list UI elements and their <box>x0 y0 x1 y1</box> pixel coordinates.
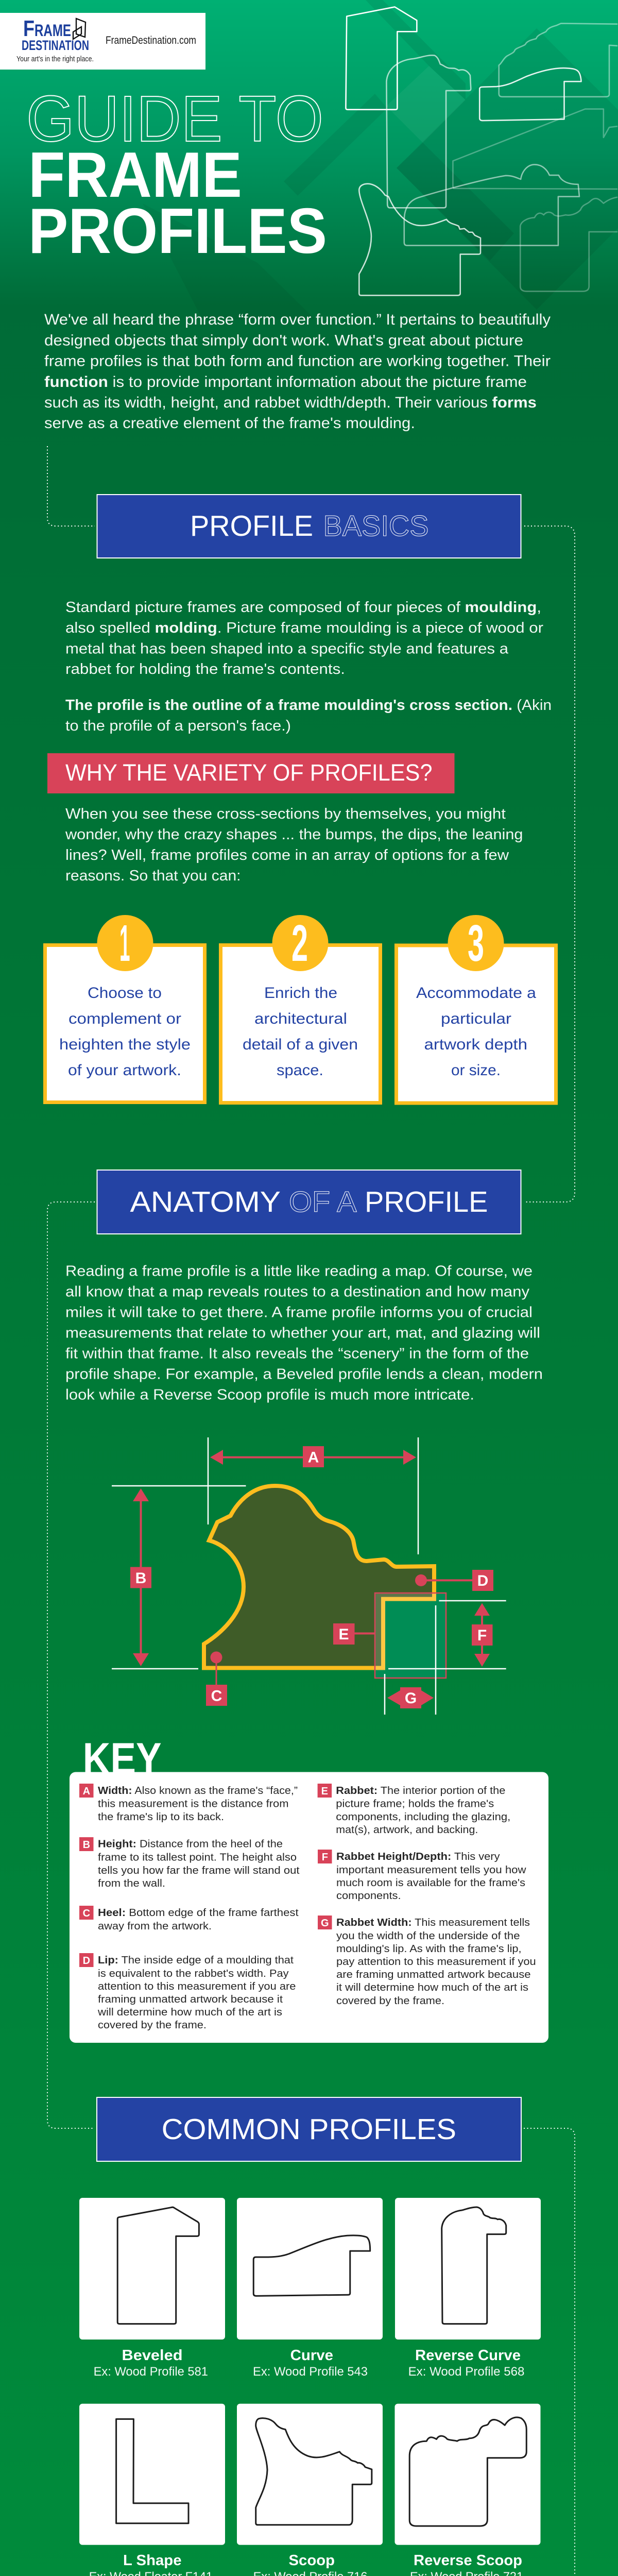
guide lines <box>112 1437 506 1715</box>
key F rabbet height: important measurement tells you how <box>336 1865 526 1876</box>
logo box: Your art's in the right place. <box>16 55 94 63</box>
text: anatomy intro: measurements that relate to whether your art, mat, and glazing will <box>65 1325 540 1342</box>
heading: anatomy of a profile: OF A <box>289 1185 357 1218</box>
key A width: the frame's lip to its back. <box>98 1811 224 1823</box>
key G rabbet width: pay attention to this measurement if you <box>336 1956 536 1968</box>
panel: scoop: Scoop <box>288 2552 335 2569</box>
card 3: artwork depth <box>424 1036 527 1053</box>
key E rabbet: mat(s), artwork, and backing. <box>336 1824 478 1836</box>
key F rabbet height: much room is available for the frame's <box>336 1877 525 1889</box>
key C heel: Heel: Bottom edge of the frame farthest <box>98 1907 299 1919</box>
heading: profile basics: PROFILE <box>190 510 313 543</box>
heading: profile basics: BASICS <box>323 510 428 543</box>
heading: common profiles <box>97 2097 521 2161</box>
heading: why the variety <box>47 753 454 793</box>
text: anatomy intro <box>65 1263 543 1403</box>
card 3: Accommodate a <box>416 985 536 1002</box>
text: anatomy intro: miles it will take to get there. A frame profile informs you of crucial <box>65 1304 533 1321</box>
card 3: particular <box>441 1010 511 1027</box>
text: anatomy intro: all know that a map reveals routes to a destination and how many <box>65 1284 530 1300</box>
key D lip: Lip: The inside edge of a moulding that <box>98 1955 294 1966</box>
panel: beveled <box>79 2198 225 2379</box>
marker G rabbet width <box>387 1687 434 1708</box>
panel: curve <box>237 2198 383 2379</box>
key F rabbet height: components. <box>336 1890 401 1902</box>
key F rabbet height <box>318 1850 526 1902</box>
intro text: designed objects that simply don't work. What's great about picture <box>44 332 523 349</box>
marker E rabbet <box>333 1623 375 1645</box>
text: moulding definition: also spelled molding . Picture frame moulding is a piece of wood or <box>65 620 543 636</box>
text: anatomy intro: fit within that frame. It also reveals the “scenery” in the form of the <box>65 1346 529 1362</box>
key E rabbet: picture frame; holds the frame's <box>336 1798 494 1809</box>
title <box>26 82 327 267</box>
key A width <box>79 1784 298 1823</box>
key A width: Width: Also known as the frame's “face,” <box>98 1785 298 1797</box>
marker B height <box>130 1488 151 1666</box>
marker A width <box>210 1446 416 1467</box>
dotted connector lines <box>47 446 575 2576</box>
card 3 <box>397 914 556 1103</box>
key G rabbet width <box>318 1916 536 2007</box>
panel: reverse scoop: Reverse Scoop <box>414 2552 522 2569</box>
card 1: of your artwork. <box>68 1062 181 1079</box>
card 1: heighten the style <box>59 1036 191 1053</box>
title: PROFILES <box>28 196 327 267</box>
key C heel: C <box>83 1908 90 1919</box>
logo box: DESTINATION <box>22 38 89 53</box>
card 3: 3 <box>468 914 484 972</box>
key D lip: D <box>83 1955 90 1967</box>
marker F rabbet height: F <box>477 1627 487 1644</box>
text: anatomy intro: Reading a frame profile is a little like reading a map. Of course, we <box>65 1263 533 1280</box>
heading: why the variety: WHY THE VARIETY OF PROFILES? <box>65 759 433 786</box>
logo box: RAME <box>35 21 71 40</box>
key D lip: framing unmatted artwork because it <box>98 1994 283 2005</box>
marker C heel: C <box>211 1688 222 1704</box>
key B height: tells you how far the frame will stand out <box>98 1865 300 1876</box>
heading: anatomy of a profile <box>97 1170 521 1234</box>
marker B height: B <box>135 1570 146 1587</box>
key D lip: attention to this measurement if you are <box>98 1981 296 1992</box>
card 2: Enrich the <box>264 985 337 1002</box>
title: GUIDE TO <box>26 82 323 155</box>
card 2: space. <box>277 1062 323 1079</box>
panel: scoop <box>237 2404 383 2576</box>
key C heel: away from the artwork. <box>98 1921 212 1932</box>
logo box: F <box>23 16 35 41</box>
key G rabbet width: you the width of the underside of the <box>336 1930 520 1942</box>
header profile outlines <box>346 7 617 295</box>
text: moulding definition: Standard picture frames are composed of four pieces of moulding , <box>65 599 541 616</box>
key C heel <box>79 1906 299 1932</box>
key D lip: covered by the frame. <box>98 2020 207 2031</box>
key E rabbet: components, including the glazing, <box>336 1811 510 1823</box>
key B height: from the wall. <box>98 1878 165 1889</box>
heading: common profiles: COMMON PROFILES <box>162 2113 456 2146</box>
intro text: such as its width, height, and rabbet width/depth. Their various forms <box>44 394 537 411</box>
marker C heel <box>206 1652 227 1706</box>
heading: profile basics <box>97 495 521 558</box>
text: moulding definition: rabbet for holding the frame's contents. <box>65 661 345 677</box>
key G rabbet width: Rabbet Width: This measurement tells <box>336 1917 530 1928</box>
intro text: frame profiles is that both form and function are working together. Their <box>44 353 551 370</box>
intro text <box>44 311 551 432</box>
text: anatomy intro: profile shape. For example, a Beveled profile lends a clean, modern <box>65 1366 543 1383</box>
panel: l shape: L Shape <box>123 2552 181 2569</box>
key B height: B <box>83 1839 90 1851</box>
key E rabbet <box>318 1784 510 1836</box>
heading: anatomy of a profile: PROFILE <box>365 1185 488 1218</box>
panel: curve: Curve <box>290 2347 333 2364</box>
panel: reverse curve <box>395 2198 541 2379</box>
card 1 <box>45 914 205 1103</box>
key D lip <box>79 1953 296 2031</box>
panel: curve: Ex: Wood Profile 543 <box>253 2365 368 2379</box>
header diamond pattern <box>143 0 618 319</box>
key G rabbet width: covered by the frame. <box>336 1995 444 2007</box>
key G rabbet width: are framing unmatted artwork because <box>336 1969 530 1980</box>
logo box <box>0 13 205 70</box>
heading: anatomy of a profile: ANATOMY <box>130 1185 281 1218</box>
key G rabbet width: G <box>321 1918 329 1929</box>
key B height: frame to its tallest point. The height also <box>98 1852 297 1863</box>
title: FRAME <box>28 140 242 211</box>
marker E rabbet: E <box>338 1626 349 1643</box>
intro text: We've all heard the phrase “form over function.” It pertains to beautifully <box>44 311 551 328</box>
text: moulding definition: metal that has been shaped into a specific style and features a <box>65 641 509 657</box>
marker F rabbet height <box>472 1603 492 1667</box>
text: why variety: lines? Well, frame profiles come in an array of options for a few <box>65 847 509 863</box>
panel: l shape <box>79 2404 225 2576</box>
text: why variety: reasons. So that you can: <box>65 868 241 884</box>
key F rabbet height: Rabbet Height/Depth: This very <box>336 1851 500 1862</box>
key A width: A <box>83 1786 90 1797</box>
intro text: function is to provide important information about the picture frame <box>44 374 527 391</box>
panel: beveled: Beveled <box>122 2347 182 2364</box>
key E rabbet: E <box>321 1786 328 1797</box>
rabbet frame <box>375 1593 446 1678</box>
text: moulding definition <box>65 599 552 734</box>
key G rabbet width: moulding's lip. As with the frame's lip, <box>336 1943 522 1955</box>
panel: reverse curve: Ex: Wood Profile 568 <box>408 2365 524 2379</box>
key G rabbet width: it will determine how much of the art is <box>336 1982 528 1993</box>
text: why variety: When you see these cross-sections by themselves, you might <box>65 806 506 822</box>
intro text: serve as a creative element of the frame's moulding. <box>44 415 415 432</box>
key panel <box>70 1772 548 2043</box>
panel: reverse scoop <box>394 2404 541 2576</box>
key D lip: is equivalent to the rabbet's width. Pay <box>98 1968 288 1979</box>
card 1: Choose to <box>88 985 162 1002</box>
panel: beveled: Ex: Wood Profile 581 <box>94 2365 208 2379</box>
moulding cross section <box>204 1486 434 1668</box>
key D lip: will determine how much of the art is <box>97 2007 282 2018</box>
text: why variety: wonder, why the crazy shapes ... the bumps, the dips, the leaning <box>65 826 523 843</box>
key F rabbet height: F <box>322 1852 328 1863</box>
card 2: 2 <box>291 914 308 972</box>
text: why variety <box>65 806 523 884</box>
key heading: KEY <box>83 1734 162 1784</box>
rabbet highlight area <box>375 1593 446 1678</box>
card 2: detail of a given <box>243 1036 358 1053</box>
marker D lip: D <box>477 1572 488 1589</box>
marker D lip <box>415 1570 493 1591</box>
card 1: 1 <box>119 914 130 972</box>
panel: reverse curve: Reverse Curve <box>415 2347 521 2364</box>
marker A width: A <box>308 1449 319 1466</box>
logo box: FrameDestination.com <box>106 35 196 46</box>
anatomy diagram <box>112 1437 506 1715</box>
key A width: this measurement is the distance from <box>98 1798 288 1809</box>
marker G rabbet width: G <box>405 1690 417 1707</box>
text: moulding definition: to the profile of a person's face.) <box>65 718 291 734</box>
card 2: architectural <box>254 1010 347 1027</box>
card 2 <box>220 914 380 1103</box>
text: anatomy intro: look while a Reverse Scoop profile is much more intricate. <box>65 1387 474 1403</box>
key E rabbet: Rabbet: The interior portion of the <box>336 1785 505 1797</box>
text: moulding definition: The profile is the outline of a frame moulding's cross section. (Akin <box>65 697 552 714</box>
key B height <box>79 1837 300 1889</box>
key B height: Height: Distance from the heel of the <box>98 1838 283 1850</box>
card 1: complement or <box>68 1010 181 1027</box>
card 3: or size. <box>451 1062 501 1079</box>
